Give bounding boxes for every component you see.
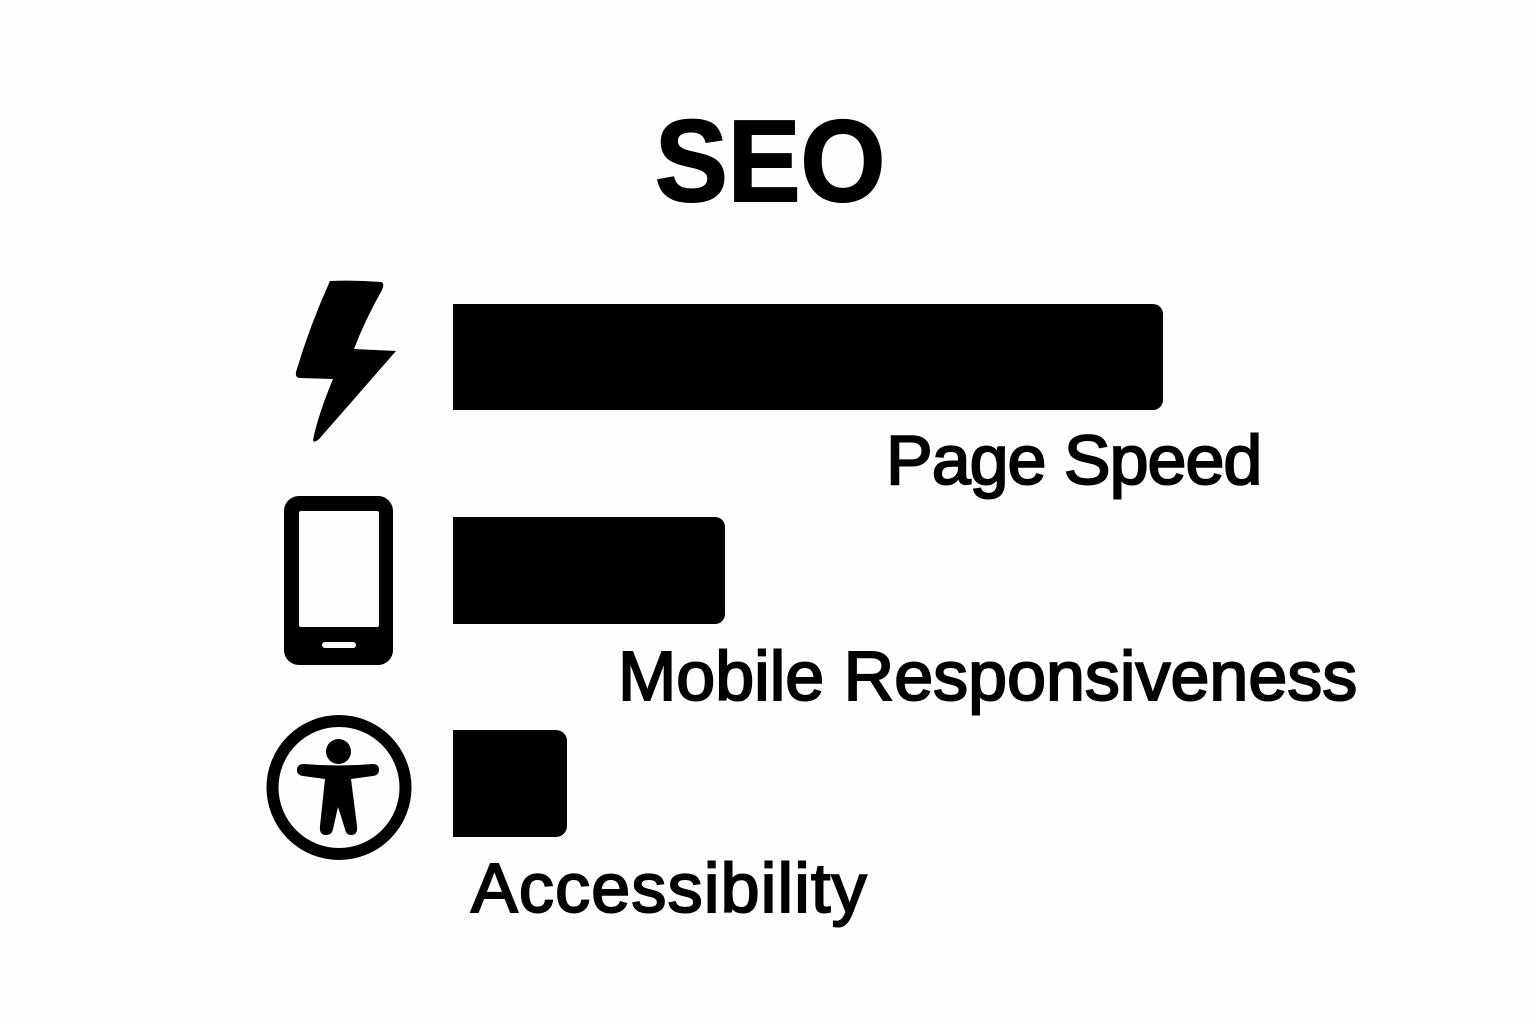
icon: mobile phone [284, 496, 393, 665]
label: Mobile Responsiveness: Mobile Responsiveness [618, 637, 1357, 715]
label: Accessibility: Accessibility [471, 849, 868, 927]
bar: Page Speed [453, 304, 1163, 410]
icon: accessibility [266, 715, 412, 860]
title: SEO [655, 96, 885, 226]
bar: Mobile Responsiveness [453, 517, 725, 624]
icon: lightning bolt [296, 280, 396, 442]
label: Page Speed: Page Speed [886, 421, 1261, 499]
bar: Accessibility [453, 730, 567, 837]
